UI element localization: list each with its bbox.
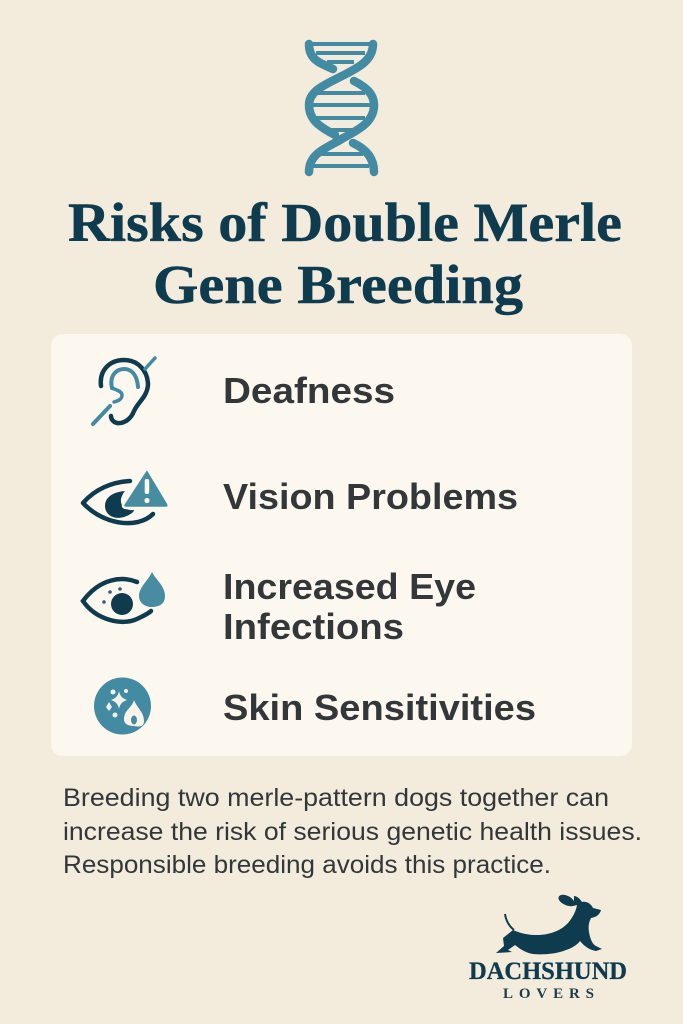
icon: eye with droplet (83, 572, 165, 622)
icon: dog tail (505, 914, 514, 930)
text block: explanation: increase the risk of serious genetic health issues. (63, 818, 642, 846)
icon: leaping dachshund (496, 895, 602, 954)
icon: skin sensitivity badge (94, 678, 151, 734)
label: Increased Eye Infections (223, 566, 476, 647)
label: Deafness: Deafness (223, 370, 395, 411)
icon: DNA helix (309, 44, 374, 172)
label: Increased Eye Infections: Infections (223, 606, 404, 647)
title: Gene Breeding (153, 254, 523, 315)
wordmark: Lovers: LOVERS (503, 986, 594, 1002)
icon: crossed-out ear (93, 358, 155, 424)
icon: eye with warning triangle (83, 468, 169, 523)
title (68, 192, 622, 315)
title: Risks of Double Merle (68, 192, 622, 253)
panel: risks list (51, 334, 632, 756)
text block: explanation (63, 784, 642, 879)
label: Increased Eye Infections: Increased Eye (223, 566, 476, 607)
logo: Dachshund Lovers (469, 895, 627, 1002)
text block: explanation: Breeding two merle-pattern dogs together can (63, 784, 609, 812)
label: Vision Problems: Vision Problems (223, 476, 518, 517)
wordmark: Dachshund: DACHSHUND (469, 958, 627, 985)
text block: explanation: Responsible breeding avoids this practice. (63, 851, 551, 879)
label: Skin Sensitivities: Skin Sensitivities (223, 687, 536, 728)
